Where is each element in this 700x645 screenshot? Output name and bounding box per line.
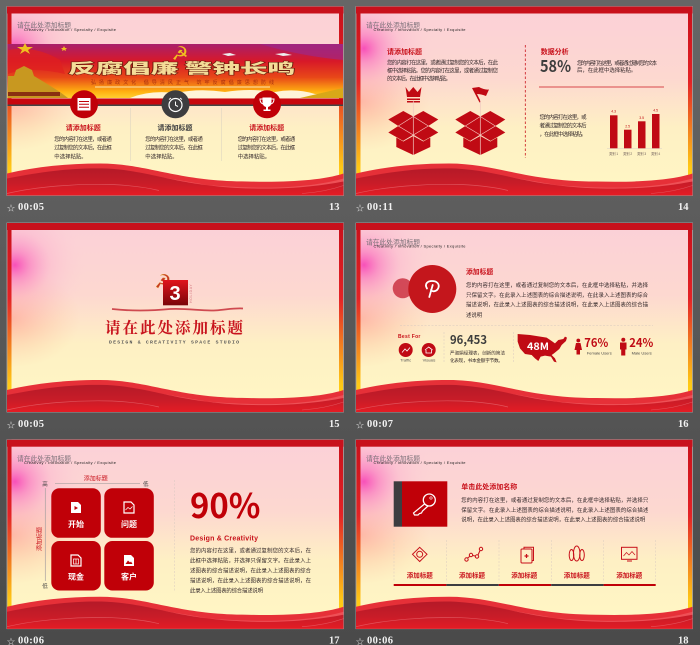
best for: Traffic bbox=[400, 358, 411, 362]
intro text: 只保留文字。在此录入上述图表的综合描述说明，在此录入上述图表的综合 bbox=[466, 291, 649, 299]
slide 18 heading: Creativity / Innovation / Specialty / Exquisite bbox=[374, 460, 466, 465]
icon: document bbox=[70, 90, 98, 118]
dashed separator bbox=[400, 324, 653, 326]
best for bbox=[398, 334, 436, 362]
column dividers bbox=[394, 540, 656, 581]
column 1 text: 请添加标题 bbox=[66, 123, 101, 132]
segmented bar bbox=[394, 584, 656, 586]
matrix axes: 低 bbox=[143, 480, 149, 488]
slide 14 footer: 00:11 bbox=[367, 202, 393, 213]
slide 18 footer bbox=[356, 636, 688, 645]
female users: Female Users bbox=[587, 350, 612, 356]
design and creativity text: 您的内容打在这里，或者通过复制您的文本后，在 bbox=[190, 547, 312, 555]
column 1 text: 中选择粘贴。 bbox=[54, 152, 87, 160]
column 2 text: 您的内容打在这里，或者通 bbox=[145, 135, 203, 143]
stat 96,453: 96,453 bbox=[450, 331, 487, 348]
slide 14 heading: Creativity / Innovation / Specialty / Exquisite bbox=[374, 27, 466, 32]
chart description bbox=[540, 113, 587, 138]
design and creativity text: 描述说明，在此录入上述图表的综合描述说明，在 bbox=[190, 576, 312, 584]
key text block: 您的内容打在这里，或者通过复制您的文本后，在此框中选择粘贴，并选择只 bbox=[461, 496, 649, 504]
slide 15 footer: 15 bbox=[329, 419, 340, 430]
slide 14 footer: ☆ bbox=[356, 204, 364, 214]
column labels: 添加标题 bbox=[407, 571, 433, 580]
slide 13 heading: 请在此处添加标题 bbox=[17, 20, 71, 30]
slide 16 footer bbox=[356, 419, 688, 432]
matrix axes bbox=[36, 474, 149, 590]
big stat 90%: 90% bbox=[190, 479, 260, 528]
bar chart: 类别 4 bbox=[651, 151, 660, 156]
bar chart: 3.5 bbox=[639, 116, 644, 120]
matrix tile: problem: 问题 bbox=[121, 519, 137, 529]
slide 16 footer: ☆ bbox=[356, 420, 364, 432]
chart description: 者通过复制您的文本后 bbox=[540, 122, 587, 130]
number badge: ☭ bbox=[154, 271, 172, 293]
icon: open box left bbox=[388, 100, 438, 155]
bar chart: 2.5 bbox=[625, 124, 630, 128]
stat description: 后，在此框中选择粘贴。 bbox=[577, 66, 636, 74]
left text block: 框中选择粘贴。您的内容打在这里，或者通过复制您 bbox=[387, 66, 499, 74]
slide 14: boxes and data analysis bbox=[356, 6, 692, 196]
slide 13 heading bbox=[17, 20, 117, 32]
key block bbox=[394, 481, 447, 527]
stat 96,453 bbox=[450, 331, 505, 364]
intro text: 描述说明，在此录入上述图表的综合描述说明，在此录入上述图表的综合描 bbox=[466, 300, 649, 308]
column labels: 添加标题 bbox=[459, 571, 486, 580]
slide 17 heading: 请在此处添加标题 bbox=[17, 454, 71, 463]
separator bbox=[539, 86, 664, 88]
US map with 48M bbox=[518, 334, 567, 362]
matrix tile: customer bbox=[104, 541, 154, 590]
icon: cards bbox=[521, 547, 534, 563]
male users: 24% bbox=[629, 334, 654, 351]
number badge: 3 bbox=[169, 283, 181, 305]
column 3 text: 中选择粘贴。 bbox=[238, 152, 270, 160]
key text block: 单击此处添加名称 bbox=[461, 482, 517, 491]
matrix tile: customer: 客户 bbox=[121, 572, 137, 582]
bar chart: 类别 3 bbox=[637, 151, 646, 156]
column 2 text: 请添加标题 bbox=[158, 123, 192, 132]
slide 16 heading bbox=[366, 238, 466, 248]
data analysis heading: 数据分析 bbox=[541, 47, 569, 56]
chart description: ，在此框中选择粘贴。 bbox=[540, 130, 586, 138]
slide 14 footer: 14 bbox=[678, 202, 689, 213]
column labels: 添加标题 bbox=[616, 571, 643, 580]
left text block: 您的内容打在这里，或者通过复制您的文本后，在此 bbox=[387, 58, 499, 66]
column labels bbox=[407, 571, 643, 580]
icon: monitor chart bbox=[622, 547, 637, 561]
icon: flag bbox=[472, 87, 489, 102]
column dividers bbox=[130, 108, 221, 161]
slide 15 footer: ☆ bbox=[6, 420, 16, 432]
intro text: 添加标题 bbox=[466, 267, 493, 276]
left text block bbox=[387, 47, 499, 82]
slide 16 heading: Creativity / Innovation / Specialty / Exquisite bbox=[374, 244, 466, 248]
matrix axes: 低 bbox=[42, 582, 48, 590]
bar chart bbox=[607, 108, 662, 156]
key text block bbox=[461, 482, 649, 524]
matrix axes: 高 bbox=[42, 480, 48, 488]
big stat 58%: 58% bbox=[540, 53, 571, 77]
column 3 text: 过复制您的文本后，在此框 bbox=[238, 144, 296, 152]
left text block: 请添加标题 bbox=[387, 47, 422, 56]
banner strip bbox=[8, 98, 343, 106]
slide 16: pinterest stats bbox=[356, 223, 692, 412]
slide 13 footer: ☆ bbox=[6, 204, 16, 214]
design and creativity text: 此录入上述图表的综合描述说明 bbox=[190, 586, 263, 594]
icon: crown bbox=[406, 87, 422, 102]
banner image: 弘扬廉政文化 倡导清风正气 筑牢反腐倡廉思想防线 bbox=[91, 79, 274, 86]
slide 18 heading: 请在此处添加标题 bbox=[366, 454, 420, 463]
chart description: 您的内容打在这里，或 bbox=[540, 113, 587, 121]
slide 17 footer bbox=[6, 636, 340, 645]
slide 17 heading: Creativity / Innovation / Specialty / Exquisite bbox=[24, 460, 117, 465]
slide 13 footer: 00:05 bbox=[18, 202, 44, 213]
key text block: 保留文字。在此录入上述图表的综合描述说明，在此录入上述图表的综合描述 bbox=[461, 506, 649, 514]
intro text bbox=[466, 267, 649, 319]
number badge: HOLIDAY bbox=[189, 284, 193, 303]
column 3 text: 请添加标题 bbox=[249, 123, 284, 132]
bar chart: 类别 2 bbox=[623, 151, 632, 156]
slide 14 heading: 请在此处添加标题 bbox=[366, 20, 420, 30]
matrix axes: 添加标题 bbox=[36, 527, 44, 551]
design and creativity text: 述图表的综合描述说明，在此录入上述图表的综合 bbox=[190, 566, 312, 574]
icon: connected nodes bbox=[465, 547, 483, 561]
slide 18 heading bbox=[366, 454, 466, 465]
number badge bbox=[154, 271, 193, 305]
slide 15 footer: 00:05 bbox=[18, 419, 44, 430]
slide 13 footer: 13 bbox=[329, 202, 340, 213]
stat 96,453: 严淑娟经理表，创新的简洁 bbox=[450, 350, 505, 356]
key text block: 说明，在此录入上述图表的综合描述说明，在此录入上述图表的综合描述说明 bbox=[461, 516, 645, 524]
icon: team bbox=[569, 546, 584, 561]
ribbon line bbox=[112, 308, 243, 311]
column 3 text: 您的内容打在这里，或者通 bbox=[238, 135, 296, 143]
male users: Male Users bbox=[632, 350, 652, 356]
best for: Visuals bbox=[423, 358, 435, 362]
matrix tile: cash bbox=[51, 541, 101, 590]
slide 13 heading: Creativity / Innovation / Specialty / Exquisite bbox=[24, 27, 117, 32]
column labels: 添加标题 bbox=[511, 571, 538, 580]
slide 16 heading: 请在此处添加标题 bbox=[366, 238, 420, 246]
left text block: 的文本后，在此框中选择粘贴。 bbox=[387, 74, 451, 82]
slide 18: key block and icon row bbox=[356, 440, 692, 629]
bar chart: 4.3 bbox=[611, 110, 616, 114]
slide 17: matrix and 90% bbox=[7, 440, 344, 629]
stat description bbox=[577, 59, 658, 74]
male users bbox=[620, 334, 654, 356]
column 2 text bbox=[145, 123, 203, 160]
slide 16 footer: 16 bbox=[678, 419, 688, 430]
icon: pinterest circles bbox=[393, 265, 456, 313]
column 2 text: 中选择粘贴。 bbox=[145, 152, 178, 160]
slide 16 footer: 00:07 bbox=[367, 419, 393, 430]
female users bbox=[574, 334, 612, 356]
column labels: 添加标题 bbox=[564, 571, 590, 580]
section subtitle: DESIGN & CREATIVITY SPACE STUDIO bbox=[109, 340, 239, 346]
banner image: 反腐倡廉 警钟长鸣 bbox=[68, 58, 295, 78]
intro text: 述说明 bbox=[466, 311, 482, 319]
design and creativity text: 此框中选择粘贴，并选择只保留文字。在此录入上 bbox=[190, 556, 312, 564]
slide 17 heading bbox=[17, 454, 117, 465]
slide 15 footer bbox=[6, 419, 340, 432]
banner image bbox=[8, 43, 343, 98]
female users: 76% bbox=[584, 334, 609, 351]
slide 15: section title bbox=[7, 223, 344, 412]
slide 13: banner and three columns bbox=[7, 6, 344, 196]
stat description: 您的内容打在这里，或者通过复制您的文本 bbox=[577, 59, 658, 67]
icon: clock bbox=[162, 90, 190, 118]
design and creativity text: Design & Creativity bbox=[190, 536, 258, 542]
bar chart: 4.5 bbox=[653, 108, 658, 112]
slide 13 footer bbox=[6, 202, 340, 214]
stat 96,453: 化表现，书本金额字节数。 bbox=[450, 357, 503, 364]
column 1 text: 过复制您的文本后，在此框 bbox=[54, 144, 112, 152]
design and creativity text bbox=[190, 536, 312, 594]
matrix tile: cash: 现金 bbox=[68, 572, 84, 582]
intro text: 您的内容打在这里，或者通过复制您的文本后，在此框中选择粘贴，并选择 bbox=[466, 281, 649, 289]
dashed dividers bbox=[444, 332, 514, 362]
column 3 text bbox=[238, 123, 296, 160]
matrix tile: start: 开始 bbox=[68, 519, 84, 529]
icon: trophy bbox=[253, 90, 281, 118]
section title: 请在此处添加标题 bbox=[105, 316, 243, 338]
column 2 text: 过复制您的文本后，在此框 bbox=[145, 144, 203, 152]
icon: open box right bbox=[455, 100, 505, 155]
US map with 48M: 48M bbox=[527, 338, 549, 353]
column 1 text: 您的内容打在这里，或者通 bbox=[54, 135, 112, 143]
icon: diamond target bbox=[412, 547, 427, 562]
dashed divider bbox=[524, 45, 526, 158]
matrix tile: problem bbox=[104, 488, 154, 538]
column 1 text bbox=[54, 123, 112, 160]
slide 14 heading bbox=[366, 20, 466, 32]
slide 14 footer bbox=[356, 202, 689, 214]
best for: Best For bbox=[398, 334, 421, 340]
dashed divider bbox=[173, 480, 175, 592]
banner image: ☭ bbox=[171, 43, 189, 65]
matrix axes: 添加标题 bbox=[84, 474, 108, 482]
bar chart: 类别 1 bbox=[609, 151, 618, 156]
matrix tile: start bbox=[51, 488, 101, 538]
